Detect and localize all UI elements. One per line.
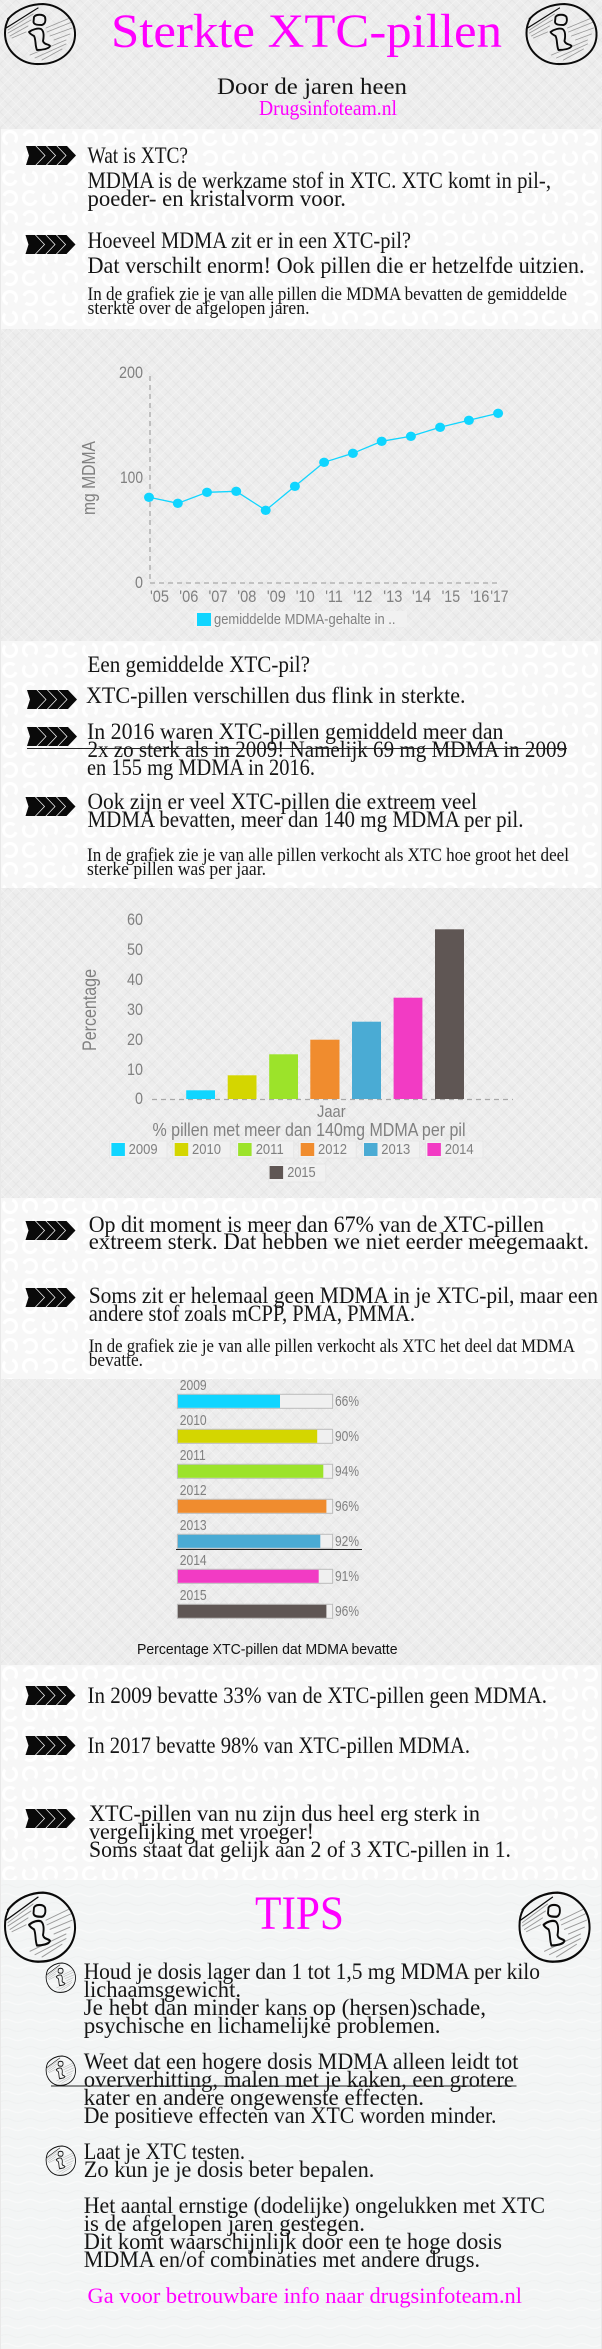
- icon: arrows: [26, 235, 76, 254]
- icon: info left: [5, 4, 75, 64]
- icon: arrows: [26, 1288, 76, 1307]
- x axis labels: '06: [179, 587, 198, 606]
- bar 2011: [177, 1447, 359, 1480]
- icon: arrows: [26, 1686, 76, 1705]
- bar 2015: 96%: [335, 1603, 359, 1620]
- legend: 2013: [381, 1141, 410, 1158]
- y axis title: mg MDMA: [79, 441, 99, 515]
- x axis labels: '07: [208, 587, 228, 606]
- text: Ook zijn er veel XTC-pillen die extreem veel: [88, 789, 477, 814]
- icon: small info: [46, 1963, 76, 1992]
- x axis labels: '08: [237, 587, 256, 606]
- text: [89, 1212, 589, 1254]
- legend: 2015: [287, 1164, 316, 1181]
- bar 2012: 2012: [180, 1482, 207, 1499]
- question: Hoeveel MDMA zit er in een XTC-pil?: [88, 228, 411, 253]
- tip 2: Weet dat een hogere dosis MDMA alleen leidt tot: [84, 2049, 519, 2074]
- x axis labels: '10: [296, 587, 315, 606]
- tip 3: [84, 2139, 374, 2182]
- text: accidents: Dit komt waarschijnlijk door een te hoge dosis: [84, 2229, 502, 2254]
- text: en 155 mg MDMA in 2016.: [87, 755, 315, 780]
- chart intro: [88, 284, 567, 319]
- text: accidents: is de afgelopen jaren gestegen.: [84, 2211, 365, 2236]
- bar 2014: [177, 1552, 359, 1585]
- tip 3: Zo kun je je dosis beter bepalen.: [84, 2157, 374, 2182]
- text: [89, 1283, 598, 1326]
- answer: [88, 168, 551, 211]
- chart intro: [89, 1336, 575, 1371]
- tip 1: Je hebt dan minder kans op (hersen)schade,: [84, 1995, 486, 2020]
- bar 2014: 91%: [335, 1568, 359, 1585]
- bar 2012: [177, 1482, 359, 1515]
- panel: bar chart strong pills: [1, 888, 601, 1198]
- icon: info left: [5, 1893, 75, 1962]
- y axis labels: 50: [127, 940, 143, 959]
- chart intro: bevatte.: [89, 1350, 143, 1371]
- icon: arrows: [27, 727, 77, 746]
- text: In 2016 waren XTC-pillen gemiddeld meer dan: [87, 719, 504, 744]
- icon: arrows: [26, 1736, 76, 1755]
- x axis title: Jaar: [317, 1102, 346, 1121]
- icon: arrows: [26, 1809, 76, 1828]
- icon: info right: [526, 4, 597, 64]
- bar 2013: 92%: [335, 1533, 359, 1550]
- legend: [110, 1141, 483, 1182]
- x axis labels: [150, 587, 508, 606]
- answer: poeder- en kristalvorm voor.: [88, 186, 346, 211]
- legend: gemiddelde MDMA-gehalte in ..: [214, 611, 396, 628]
- icon: small info: [46, 2056, 76, 2085]
- bar 2015: 2015: [180, 1587, 207, 1604]
- legend: 2014: [445, 1141, 474, 1158]
- title: Sterkte XTC-pillen: [111, 5, 502, 58]
- heading: TIPS: [255, 1887, 344, 1940]
- text: [88, 789, 524, 832]
- answer: MDMA is de werkzame stof in XTC. XTC komt in pil-,: [88, 168, 551, 193]
- x axis labels: '17: [490, 587, 508, 606]
- bar 2015: [177, 1587, 359, 1620]
- x axis labels: '14: [412, 587, 431, 606]
- text: accidents: [84, 2193, 545, 2272]
- chart title: Percentage XTC-pillen dat MDMA bevatte: [137, 1641, 398, 1658]
- text: extreem sterk. Dat hebben we niet eerder meegemaakt.: [89, 1229, 589, 1254]
- tip 2: kater en andere ongewenste effecten.: [84, 2085, 424, 2110]
- x axis labels: '13: [383, 587, 402, 606]
- text: accidents: Het aantal ernstige (dodelijke) ongelukken met XTC: [84, 2193, 545, 2218]
- y axis labels: 40: [127, 970, 143, 989]
- heading: Een gemiddelde XTC-pil?: [88, 652, 310, 677]
- icon: arrows: [26, 1221, 76, 1240]
- y axis labels: 10: [127, 1060, 143, 1079]
- tip 3: Laat je XTC testen.: [84, 2139, 245, 2164]
- bar 2013: 2013: [180, 1517, 207, 1534]
- y axis labels: 100: [120, 468, 143, 487]
- bar 2011: 2011: [180, 1447, 206, 1464]
- text: vergelijking met vroeger!: [89, 1819, 314, 1844]
- tip 1: psychische en lichamelijke problemen.: [84, 2013, 440, 2038]
- y axis labels: [119, 363, 143, 592]
- panel: line chart average MDMA: [1, 329, 601, 641]
- bar 2009: 66%: [335, 1393, 359, 1410]
- tip 2: De positieve effecten van XTC worden minder.: [84, 2103, 496, 2128]
- tip 2: [84, 2049, 519, 2128]
- bar 2012: 96%: [335, 1498, 359, 1515]
- text: In 2009 bevatte 33% van de XTC-pillen geen MDMA.: [88, 1683, 547, 1708]
- y axis labels: 60: [127, 910, 143, 929]
- icon: arrows: [26, 146, 76, 165]
- bar 2010: 90%: [335, 1428, 359, 1445]
- panel: tips: [1, 1880, 601, 2349]
- y axis labels: 20: [127, 1030, 143, 1049]
- website: Drugsinfoteam.nl: [259, 96, 397, 120]
- y axis labels: [127, 910, 143, 1108]
- panel: conclusie: [1, 1665, 601, 1880]
- text: [89, 1801, 511, 1862]
- bar 2010: [177, 1412, 359, 1445]
- bar 2014: 2014: [180, 1552, 207, 1569]
- legend: 2009: [129, 1141, 158, 1158]
- text: 2x zo sterk als in 2009! Namelijk 69 mg MDMA in 2009: [88, 737, 567, 762]
- bars: [186, 929, 464, 1099]
- text: andere stof zoals mCPP, PMA, PMMA.: [89, 1301, 415, 1326]
- text: Op dit moment is meer dan 67% van de XTC-pillen: [89, 1212, 544, 1237]
- bar 2010: 2010: [180, 1412, 207, 1429]
- text: MDMA bevatten, meer dan 140 mg MDMA per pil.: [88, 807, 524, 832]
- panel: gemiddelde XTC-pil: [1, 641, 601, 888]
- legend: 2011: [256, 1141, 284, 1158]
- link: Ga voor betrouwbare info naar drugsinfoteam.nl: [88, 2283, 522, 2308]
- panel: extreem sterk: [1, 1198, 601, 1379]
- chart intro: sterke pillen was per jaar.: [87, 859, 266, 880]
- legend: 2012: [318, 1141, 347, 1158]
- x axis labels: '11: [325, 587, 343, 606]
- y axis labels: 0: [135, 1089, 143, 1108]
- text: Soms staat dat gelijk aan 2 of 3 XTC-pillen in 1.: [89, 1837, 511, 1862]
- x axis labels: '16: [470, 587, 489, 606]
- y axis labels: 200: [119, 363, 143, 382]
- x axis labels: '15: [442, 587, 460, 606]
- y axis labels: 0: [135, 573, 143, 592]
- chart intro: [87, 845, 569, 880]
- x axis labels: '09: [267, 587, 286, 606]
- icon: small info: [46, 2146, 76, 2175]
- panel: wat is XTC: [1, 129, 601, 329]
- x axis labels: '12: [353, 587, 372, 606]
- y axis title: Percentage: [80, 969, 101, 1051]
- icon: info right: [520, 1893, 590, 1962]
- bar 2009: [177, 1377, 359, 1410]
- tip 1: [84, 1959, 540, 2038]
- x axis labels: '05: [150, 587, 169, 606]
- tip 2: oververhitting, malen met je kaken, een grotere: [84, 2067, 514, 2092]
- icon: arrows: [27, 690, 77, 709]
- icon: arrows: [26, 797, 76, 816]
- bar 2013: [177, 1517, 359, 1550]
- text: accidents: MDMA en/of combinaties met andere drugs.: [84, 2247, 480, 2272]
- text: [87, 719, 567, 780]
- line series: [144, 409, 503, 515]
- bar 2009: 2009: [180, 1377, 207, 1394]
- subtitle: Door de jaren heen: [217, 74, 408, 99]
- panel: progress bar chart MDMA share: [1, 1377, 601, 1665]
- question: Wat is XTC?: [88, 143, 188, 168]
- tip 1: lichaamsgewicht.: [84, 1977, 241, 2002]
- text: In 2017 bevatte 98% van XTC-pillen MDMA.: [88, 1733, 470, 1758]
- panel: header: [0, 0, 602, 129]
- answer: Dat verschilt enorm! Ook pillen die er hetzelfde uitzien.: [88, 253, 584, 278]
- tip 1: Houd je dosis lager dan 1 tot 1,5 mg MDMA per kilo: [84, 1959, 540, 1984]
- y axis labels: 30: [127, 1000, 143, 1019]
- chart intro: sterkte over de afgelopen jaren.: [88, 298, 310, 319]
- bar 2011: 94%: [335, 1463, 359, 1480]
- legend: 2010: [192, 1141, 221, 1158]
- text: XTC-pillen van nu zijn dus heel erg sterk in: [89, 1801, 480, 1826]
- text: XTC-pillen verschillen dus flink in sterkte.: [86, 683, 466, 708]
- chart title: % pillen met meer dan 140mg MDMA per pil: [152, 1120, 466, 1140]
